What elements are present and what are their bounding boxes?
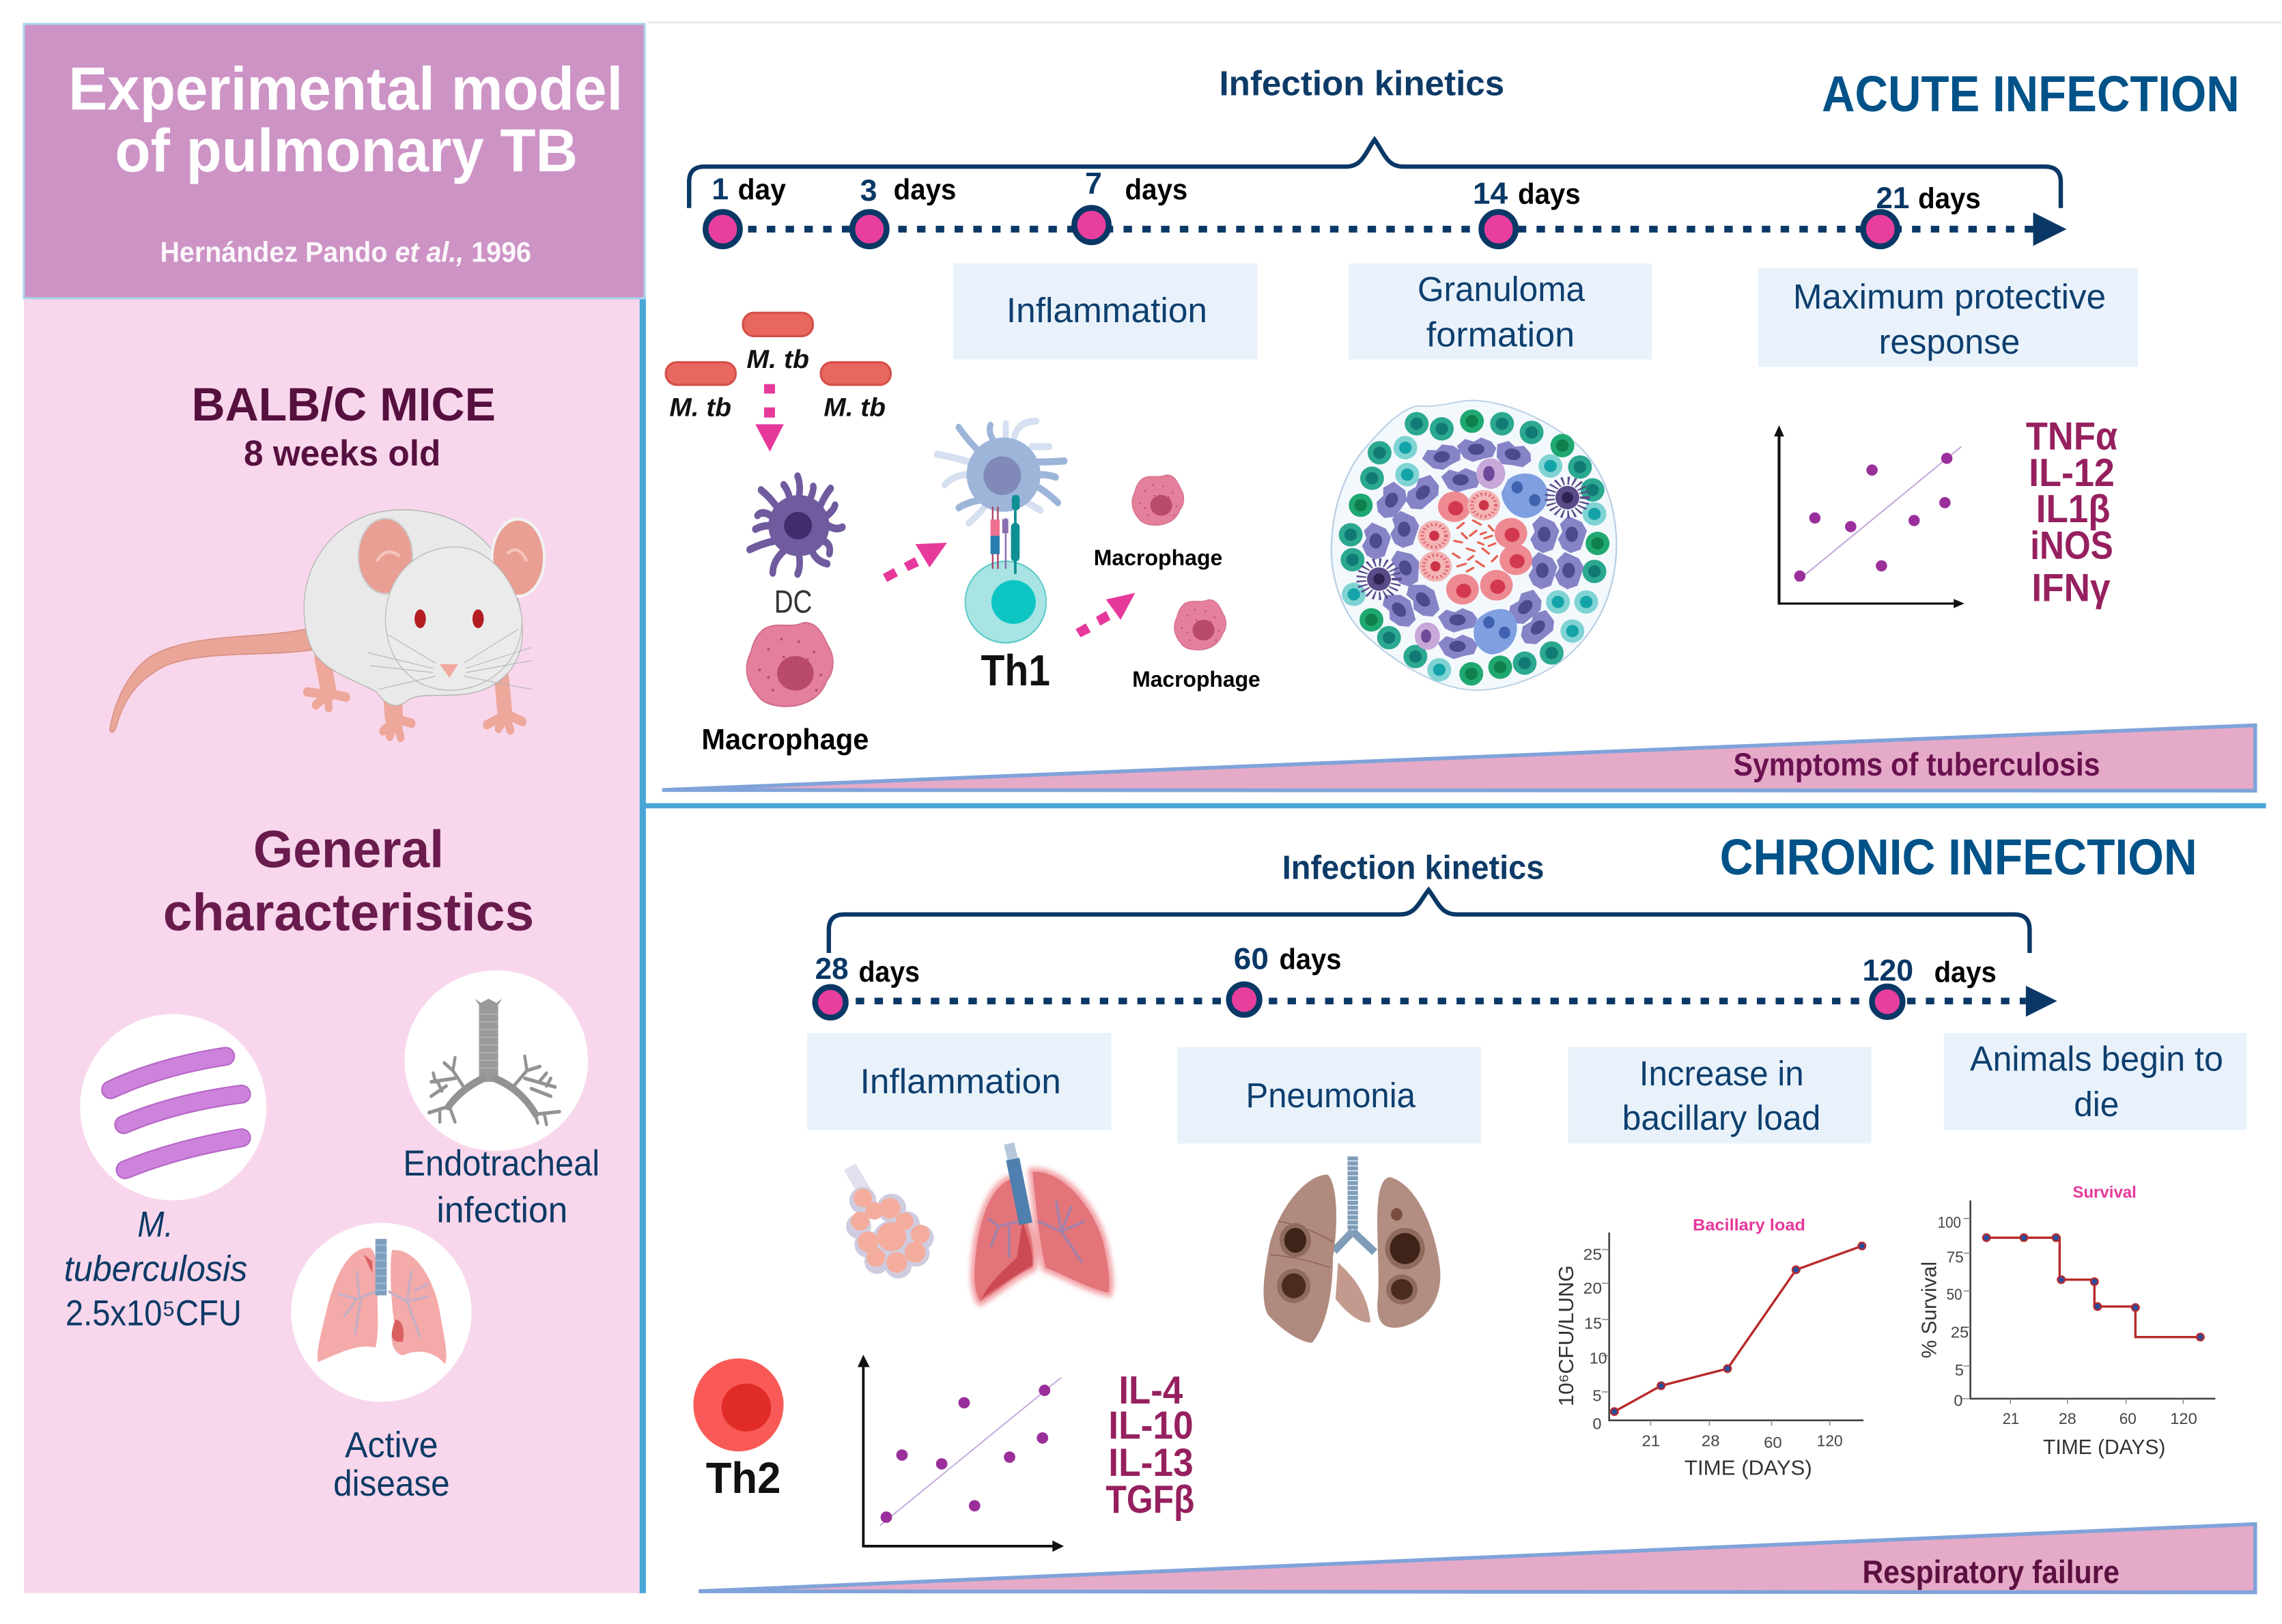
wedge: respiratory failure: Respiratory failure — [1863, 1554, 2119, 1590]
chart: survival: 50 — [1947, 1285, 1962, 1303]
icon: dendritic cell — [750, 476, 843, 574]
timeline: chronic days: days — [1279, 943, 1341, 975]
box: inflammation — [807, 1033, 1111, 1130]
timeline: acute days: 1 — [712, 172, 729, 206]
icon: macrophage upper — [1132, 475, 1184, 525]
timeline: acute days: 3 — [860, 173, 877, 208]
label: endotracheal infection — [403, 1143, 600, 1230]
arrow: DC to Th1 — [883, 543, 947, 582]
top hairline — [647, 21, 2282, 23]
chart: survival: 60 — [2119, 1410, 2137, 1427]
citation: Hernández Pando et al., 1996 — [160, 236, 531, 268]
icon: macrophage — [747, 623, 833, 707]
box: increase in bacillary load — [1568, 1047, 1872, 1143]
heading: mouse strain: 8 weeks old — [244, 433, 440, 474]
chart: survival: % Survival — [1918, 1262, 1941, 1358]
chart: bacillary load: 15 — [1584, 1315, 1602, 1333]
label: Th2: Th2 — [706, 1453, 780, 1502]
timeline: acute days — [705, 166, 2067, 246]
icon: Th2 cell — [693, 1358, 784, 1451]
icon: white mouse — [110, 510, 544, 737]
icon: M. tuberculosis bacilli — [80, 1014, 266, 1200]
wedge: symptoms of tuberculosis: Symptoms of tuberculosis — [1733, 747, 2100, 782]
cytokines: Th2 profile — [1105, 1369, 1194, 1522]
chart: bacillary load: 120 — [1817, 1432, 1843, 1450]
timeline: acute days: days — [1918, 182, 1981, 215]
icon: antigen-presenting cell and Th1 synapse — [937, 421, 1065, 643]
wedge: symptoms of tuberculosis — [662, 725, 2255, 790]
icon: trachea and bronchi — [405, 971, 588, 1151]
icon: alveoli — [846, 1167, 934, 1279]
chart: survival — [1918, 1184, 2215, 1459]
chart: bacillary load: 5 — [1592, 1387, 1601, 1405]
box: increase in bacillary load: Increase in — [1639, 1054, 1804, 1093]
chart: bacillary load — [1555, 1216, 1865, 1479]
icon: granuloma — [1332, 401, 1616, 690]
box: maximum protective response: Maximum protective — [1793, 277, 2106, 316]
timeline: chronic days — [815, 941, 2057, 1018]
cytokines: Th1 profile: IL1β — [2036, 487, 2110, 531]
chart: bacillary load: 21 — [1642, 1432, 1660, 1450]
wedge: respiratory failure — [699, 1524, 2255, 1593]
timeline: acute days: days — [894, 173, 956, 206]
timeline: chronic days: 120 — [1863, 954, 1913, 988]
box: animals begin to die: die — [2074, 1085, 2119, 1124]
icon: inflamed lungs — [974, 1143, 1110, 1301]
bracket: acute timeline — [689, 140, 2061, 208]
icon: M. tb bacilli — [666, 313, 890, 423]
label: M. tuberculosis dose: M. — [137, 1205, 173, 1245]
chart: bacillary load: TIME (DAYS) — [1685, 1457, 1812, 1479]
timeline: acute days: 21 — [1876, 181, 1909, 215]
heading: infection kinetics: Infection kinetics — [1219, 63, 1504, 102]
heading: chronic infection: CHRONIC INFECTION — [1720, 828, 2197, 885]
chart: bacillary load: 0 — [1592, 1415, 1601, 1433]
icon: M. tb bacilli: M. tb — [669, 393, 731, 423]
chart: survival: 75 — [1947, 1249, 1964, 1266]
cytokines: Th2 profile: IL-13 — [1108, 1441, 1194, 1485]
box: pneumonia — [1177, 1047, 1481, 1143]
heading: infection kinetics: Infection kinetics — [1282, 849, 1544, 886]
box: granuloma formation: Granuloma — [1418, 270, 1586, 309]
box: animals begin to die — [1944, 1033, 2246, 1130]
bracket: chronic timeline — [829, 890, 2029, 953]
cytokines: Th2 profile: IL-4 — [1118, 1369, 1183, 1412]
timeline: acute days: day — [738, 173, 786, 206]
cytokines: Th1 profile: iNOS — [2030, 524, 2113, 567]
chart: bacillary load: 10 — [1590, 1349, 1607, 1367]
timeline: chronic days: days — [859, 956, 920, 988]
label: endotracheal infection: infection — [436, 1190, 567, 1230]
timeline: acute days: days — [1518, 177, 1581, 210]
heading: mouse strain: BALB/C MICE — [192, 379, 496, 431]
label: DC: DC — [774, 584, 812, 619]
label: M. tuberculosis dose — [64, 1205, 247, 1334]
box: maximum protective response: response — [1879, 322, 2020, 361]
chart: bacillary load: 25 — [1583, 1246, 1602, 1264]
cytokines: Th2 profile: TGFβ — [1105, 1478, 1194, 1522]
heading: general characteristics: General — [253, 821, 444, 879]
chart: survival: 120 — [2170, 1410, 2197, 1427]
chart: survival: 25 — [1951, 1323, 1969, 1341]
timeline: chronic days: 60 — [1234, 941, 1269, 975]
box: animals begin to die: Animals begin to — [1970, 1040, 2223, 1079]
panel: title banner — [24, 24, 645, 298]
label: active disease — [333, 1425, 450, 1504]
chart: bacillary load: 60 — [1764, 1434, 1782, 1451]
chart: survival: 100 — [1938, 1214, 1961, 1231]
label: active disease: disease — [333, 1464, 450, 1504]
label: endotracheal infection: Endotracheal — [403, 1143, 600, 1184]
box: granuloma formation — [1349, 263, 1652, 359]
panel: chronic infection — [693, 828, 2255, 1593]
timeline: acute days: 7 — [1085, 166, 1102, 200]
box: inflammation: Inflammation — [860, 1062, 1061, 1101]
title: Experimental model — [68, 55, 623, 123]
chart: acute scatter plot — [1774, 425, 1964, 608]
chart: survival: 0 — [1954, 1392, 1962, 1409]
chart title: Bacillary load — [1693, 1216, 1805, 1234]
icon: healthy lungs — [291, 1223, 472, 1402]
box: granuloma formation: formation — [1426, 315, 1575, 354]
label: active disease: Active — [345, 1425, 438, 1466]
title: of pulmonary TB — [115, 116, 578, 184]
cytokines: Th1 profile: TNFα — [2026, 415, 2117, 459]
panel: left model description — [24, 24, 646, 1593]
arrow: bacilli to DC — [755, 384, 784, 452]
cytokines: Th1 profile — [2026, 415, 2117, 610]
label: M. tuberculosis dose: 2.5x10⁵CFU — [66, 1294, 242, 1334]
chart: survival: TIME (DAYS) — [2043, 1436, 2165, 1459]
label: M. tuberculosis dose: tuberculosis — [64, 1249, 247, 1290]
icon: M. tb bacilli: M. tb — [823, 393, 886, 423]
timeline: chronic days: 28 — [815, 952, 849, 986]
box: inflammation — [953, 263, 1258, 359]
label: macrophage: Macrophage — [701, 724, 869, 756]
chart: survival: 28 — [2059, 1410, 2076, 1427]
icon: macrophage lower — [1174, 600, 1226, 650]
heading: mouse strain — [192, 379, 496, 474]
chart: survival: 5 — [1955, 1361, 1964, 1379]
box: maximum protective response — [1758, 268, 2138, 367]
timeline: acute days: 14 — [1473, 176, 1508, 210]
label: macrophage upper: Macrophage — [1094, 545, 1222, 570]
heading: general characteristics: characteristics — [163, 884, 534, 942]
heading: general characteristics — [163, 821, 534, 942]
arrow: Th1 to macrophages — [1075, 593, 1135, 638]
cytokines: Th1 profile: IFNγ — [2031, 566, 2110, 610]
chart: chronic scatter plot — [858, 1354, 1064, 1552]
label: Th1: Th1 — [981, 646, 1050, 695]
icon: M. tb bacilli: M. tb — [746, 345, 809, 374]
timeline: acute days: days — [1125, 173, 1187, 206]
timeline: chronic days: days — [1934, 956, 1997, 989]
divider between acute and chronic panels — [645, 803, 2266, 808]
label: macrophage lower: Macrophage — [1132, 667, 1260, 692]
icon: pneumonia lungs — [1264, 1156, 1440, 1343]
box: increase in bacillary load: bacillary load — [1622, 1098, 1820, 1137]
title — [68, 55, 623, 184]
chart title: Survival — [2072, 1184, 2137, 1202]
chart: bacillary load: 10⁶CFU/LUNG — [1555, 1265, 1578, 1406]
cytokines: Th1 profile: IL-12 — [2029, 451, 2115, 495]
chart: survival: 21 — [2003, 1410, 2019, 1427]
box: pneumonia: Pneumonia — [1245, 1076, 1416, 1115]
box: inflammation: Inflammation — [1006, 291, 1207, 330]
chart: bacillary load: 20 — [1583, 1279, 1602, 1297]
chart: bacillary load: 28 — [1702, 1432, 1720, 1450]
cytokines: Th2 profile: IL-10 — [1108, 1404, 1194, 1447]
panel: acute infection — [662, 63, 2255, 790]
heading: acute infection: ACUTE INFECTION — [1822, 65, 2240, 122]
